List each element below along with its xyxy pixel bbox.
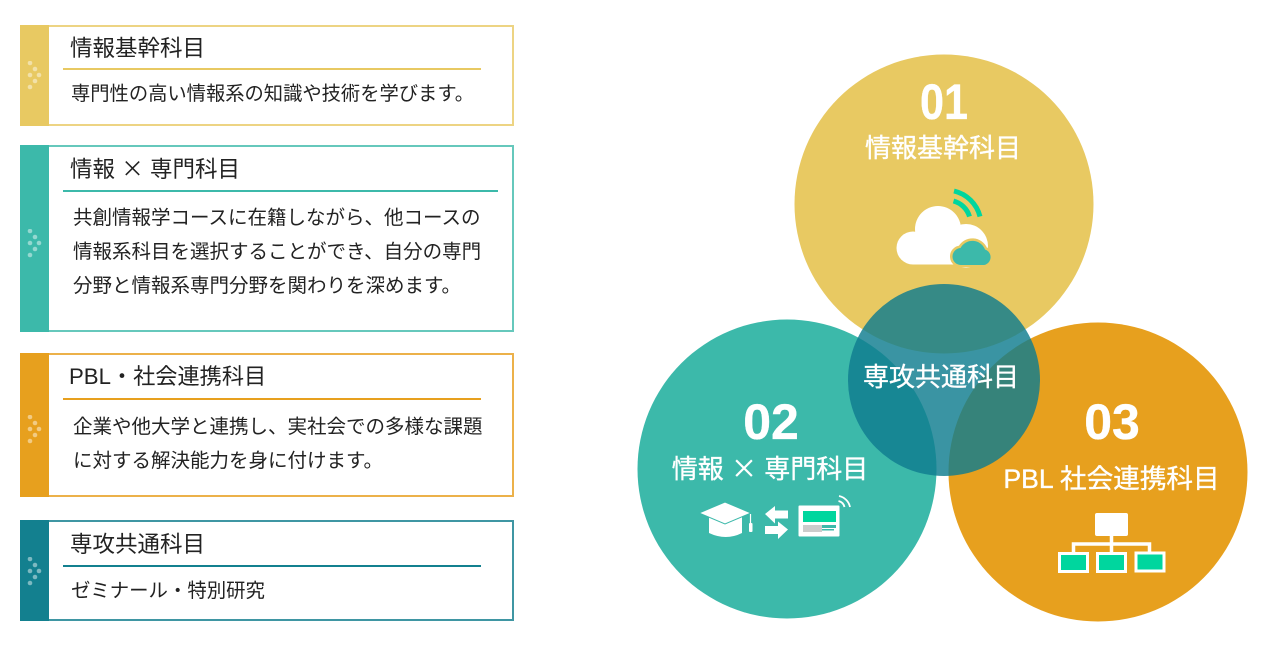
label 01: 01 [920, 74, 968, 130]
text block: 企業や他大学と連携し、実社会での多様な課題 [73, 416, 483, 438]
label center: 専攻共通科目 [863, 362, 1019, 392]
panel: 情報 × 専門科目 [20, 145, 514, 332]
label 03 [1003, 394, 1220, 494]
label 01 [865, 74, 1021, 163]
text block: 分野と情報系専門分野を関わりを深めます。 [73, 275, 461, 297]
panel: 専攻共通科目 [20, 520, 514, 621]
circle 01 [794, 54, 1094, 354]
label 03: PBL 社会連携科目 [1003, 464, 1220, 494]
text block [73, 207, 481, 297]
heading: 情報基幹科目 [70, 36, 205, 61]
heading: 専攻共通科目 [70, 532, 205, 557]
center overlap circle [848, 284, 1040, 476]
circle 03 [948, 322, 1248, 622]
heading: 情報 × 専門科目 [70, 152, 240, 184]
text block [73, 416, 483, 472]
icon: hierarchy network [1060, 513, 1164, 572]
panel: PBL・社会連携科目 [20, 353, 514, 497]
side bar with dots [20, 25, 49, 126]
label 02: 情報 × 専門科目 [672, 449, 868, 486]
label 03: 03 [1084, 394, 1140, 450]
text block: 情報系科目を選択することができ、自分の専門 [73, 241, 481, 263]
icon: graduation cap, arrows and screen [699, 496, 850, 539]
text block: 専門性の高い情報系の知識や技術を学びます。 [71, 84, 474, 105]
text block: ゼミナール・特別研究 [71, 580, 265, 602]
panel: 情報基幹科目 [20, 25, 514, 126]
icon: cloud with wifi [896, 191, 991, 268]
side bar with dots [20, 353, 49, 497]
label 02 [672, 394, 868, 486]
label 02: 02 [743, 394, 799, 450]
text block: 共創情報学コースに在籍しながら、他コースの [73, 207, 481, 229]
side bar with dots [20, 145, 49, 332]
heading: PBL・社会連携科目 [69, 364, 266, 389]
side bar with dots [20, 520, 49, 621]
label 01: 情報基幹科目 [865, 133, 1021, 163]
circle 02 [638, 320, 936, 618]
text block: に対する解決能力を身に付けます。 [73, 450, 383, 472]
